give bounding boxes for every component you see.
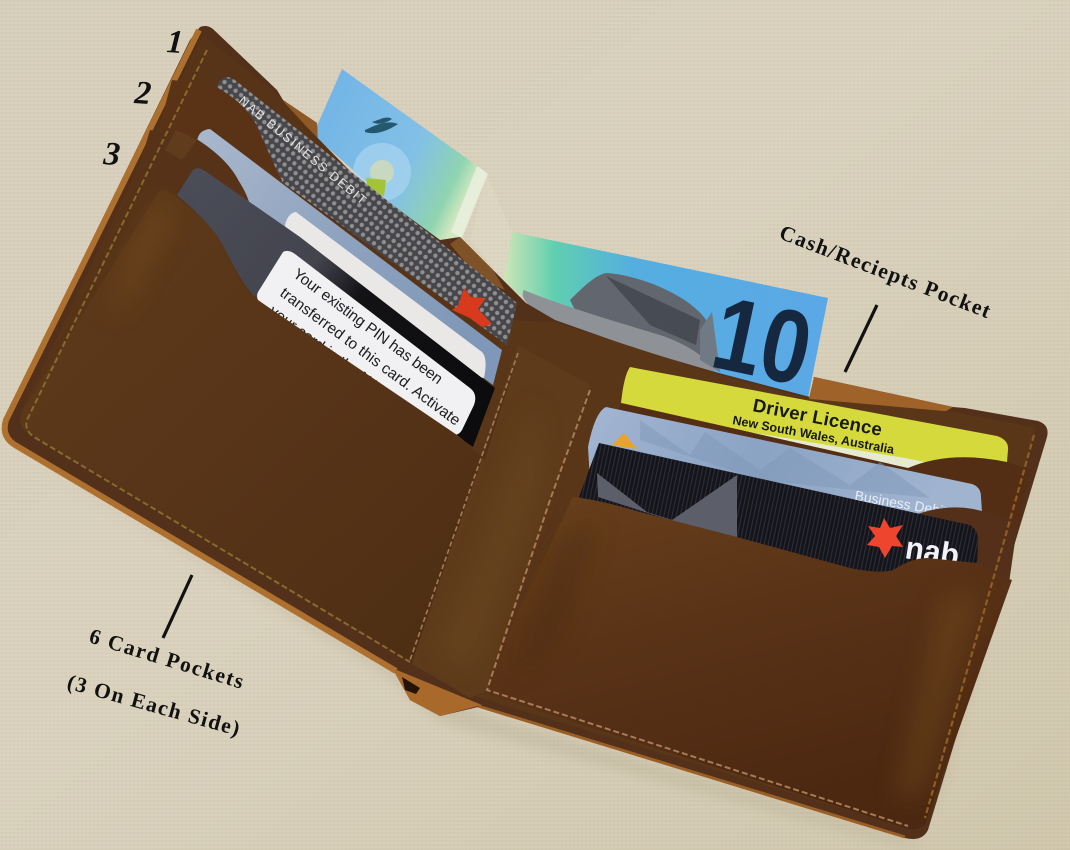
callout: six card pockets: 6 Card Pockets <box>87 624 247 694</box>
licence subtitle: New South Wales, Australia <box>731 413 896 457</box>
banknote: blue note behind cards <box>313 69 488 246</box>
spine <box>412 345 590 698</box>
stitching: spine left <box>410 353 518 660</box>
icon: red maple star <box>452 288 492 327</box>
card: light blue business debit <box>588 407 982 520</box>
card: white PIN notice label: your card in the NAB <box>266 303 391 401</box>
tab: bottom fold <box>392 668 482 716</box>
nab wordmark: nab <box>903 529 962 573</box>
icon: hat illustration <box>523 273 720 373</box>
rim: tan left edge <box>5 30 396 671</box>
pocket number 3: 3 <box>101 136 121 173</box>
card: NAB business debit <box>217 77 517 345</box>
card: yellow driver licence <box>621 367 1008 468</box>
card text: Business Debit <box>853 487 948 519</box>
icon: orange triangle <box>612 433 637 449</box>
panel: right inner leather and spine <box>412 320 1036 828</box>
banknote: ten dollar note with hat <box>470 175 828 408</box>
note value: 10: 10 <box>703 275 821 408</box>
tan back strip: cash pocket <box>808 377 953 424</box>
callout: cash and receipts pocket <box>776 220 995 372</box>
icon: nab red star <box>867 518 903 558</box>
card: white PIN notice label: transferred to this card. Activate <box>277 285 463 429</box>
pocket number 1: 1 <box>165 24 184 61</box>
stitching: left pocket <box>26 50 410 662</box>
pocket: left third layer <box>100 130 243 300</box>
stitching: right edge <box>925 435 1034 818</box>
callout: six card pockets <box>65 575 247 741</box>
pocket: right front pocket <box>487 390 1034 829</box>
callout: cash and receipts pocket: Cash/Reciepts Pocket <box>776 220 995 323</box>
arrow: cash pocket pointer line <box>845 305 877 372</box>
pocket: right third layer <box>915 507 1018 590</box>
card: left black card <box>177 168 495 447</box>
pocket number 2: 2 <box>132 75 152 112</box>
callout: six card pockets: (3 On Each Side) <box>65 670 243 741</box>
licence title: Driver Licence <box>751 394 884 440</box>
notice text: Your existing PIN has been <box>290 266 446 388</box>
card: white PIN notice label <box>257 251 475 435</box>
card text: NAB BUSINESS DEBIT <box>236 94 369 207</box>
stitching: right pocket bottom and spine <box>487 390 908 826</box>
card: left silver card <box>197 129 502 385</box>
arrow: card pockets pointer line <box>163 575 192 638</box>
card: white card in sleeve <box>285 212 486 378</box>
pocket: left second layer <box>140 80 282 215</box>
rim: thin bottom edge <box>478 706 905 837</box>
pocket: left front pocket <box>20 50 518 662</box>
pocket: right second layer <box>580 403 1030 590</box>
panel: left back leather <box>20 36 520 660</box>
card: black nab card <box>579 443 978 580</box>
